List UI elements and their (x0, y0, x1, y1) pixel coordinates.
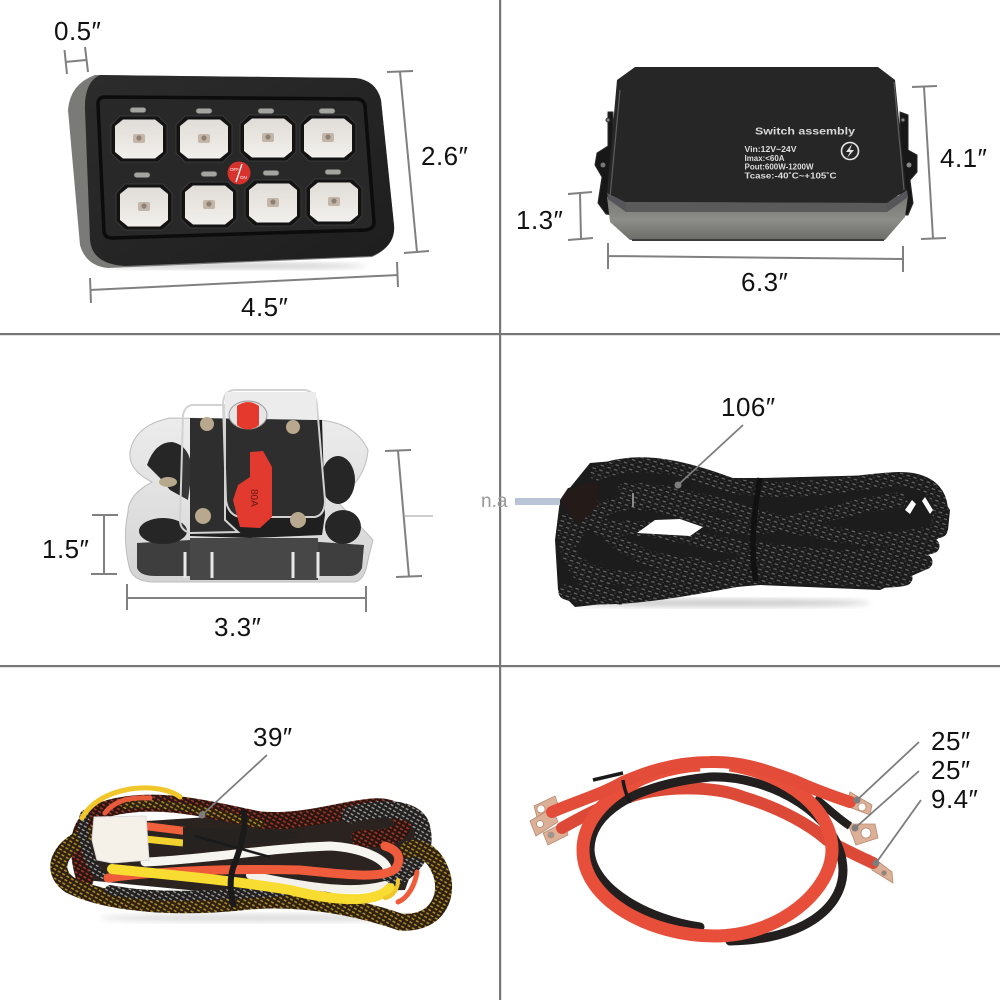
dimension: length 39 inch (198, 722, 293, 818)
dimension: width 4.5 inch: 4.5″ (241, 292, 288, 322)
watermark fragment: n.a (481, 491, 508, 512)
panel: power cables (530, 726, 978, 941)
icon: cable tie (593, 773, 630, 803)
icon: red on/off button (228, 162, 250, 184)
icon: long red ring cable (583, 765, 832, 936)
label printed on box: Tcase:-40˚C~+105˚C (744, 172, 837, 180)
dimension: cable lengths: 9.4″ (931, 784, 978, 814)
icon: black cable end (815, 798, 850, 826)
watermark fragment (481, 491, 634, 512)
dimension: length 3.3 inch (127, 584, 366, 642)
panel: touch switch panel (54, 16, 468, 322)
icon: lightning bolt (842, 142, 858, 160)
icon: short red cable (562, 788, 873, 863)
dimension: width 4.1 inch (912, 86, 987, 239)
dimension: length 6.3 inch (608, 243, 903, 297)
dimension: width 4.5 inch (90, 262, 398, 322)
icon: switch panel body (68, 75, 394, 269)
icon: red reset button (229, 401, 267, 430)
icon: breaker body (190, 418, 325, 580)
label printed on box: Imax:<60A (744, 154, 785, 163)
dimension: length 3.3 inch: 3.3″ (214, 612, 261, 642)
dimension: height 2.6 inch (387, 71, 468, 253)
icon: white connector (92, 816, 185, 863)
label printed on box: Pout:600W-1200W (744, 162, 814, 172)
dimension: width 4.1 inch: 4.1″ (940, 143, 987, 173)
icon: terminal knobs (139, 442, 361, 544)
label printed on box: Vin:12V~24V (744, 145, 797, 154)
dimension: height 2.6 inch: 2.6″ (421, 141, 468, 171)
icon: braided harness coil (555, 458, 950, 607)
dimension: cable lengths: 25″ (931, 726, 971, 756)
dimension: unlabelled height line (385, 450, 433, 577)
icon: sleeved harness loops (59, 803, 444, 922)
panel: switch assembly box (516, 67, 987, 297)
icon: copper lugs (530, 792, 893, 883)
icon: coloured wires (82, 788, 417, 902)
dimension: height 1.3 inch: 1.3″ (516, 205, 563, 235)
panel: long braided harness (481, 392, 950, 607)
label printed on box: Switch assembly (755, 126, 856, 138)
dimension: cable lengths (852, 726, 978, 866)
icon: clear base cover (125, 418, 373, 582)
icon: cable ties (195, 810, 270, 907)
dimension: length 39 inch: 39″ (253, 722, 293, 752)
icon: mounting ears (595, 112, 917, 215)
icon: black cable (590, 777, 843, 941)
dimension: depth 0.5 inch: 0.5″ (54, 16, 101, 46)
dimension: height 1.3 inch (516, 192, 593, 240)
dimension: length 106 inch: 106″ (721, 392, 776, 422)
icon: box body (607, 67, 908, 240)
icon: cable tie (753, 478, 760, 581)
icon: screws (195, 417, 306, 528)
dimension: length 106 inch (674, 392, 776, 488)
icon: black heat shrink (183, 827, 297, 853)
panel: circuit breaker (42, 390, 433, 642)
icon: red lever with rating: 80A (248, 489, 259, 507)
dimension: height 1.5 inch: 1.5″ (42, 534, 89, 564)
icon: red on/off button: OFF (230, 167, 239, 172)
dimension: length 6.3 inch: 6.3″ (741, 267, 788, 297)
icon: switch buttons (111, 107, 362, 230)
icon: red lever with rating (233, 451, 272, 528)
icon: clear covers (180, 390, 325, 533)
dimension: height 1.5 inch (42, 515, 118, 574)
clear cover top highlight (225, 392, 317, 420)
panel: medium harness with wires (59, 722, 444, 922)
icon: red on/off button: ON (240, 175, 247, 180)
icon: base slits (185, 552, 318, 578)
label printed on box (744, 126, 856, 180)
dimension: depth 0.5 inch (54, 16, 101, 74)
dimension: cable lengths: 25″ (931, 755, 971, 785)
icon: top red cable (552, 762, 850, 812)
